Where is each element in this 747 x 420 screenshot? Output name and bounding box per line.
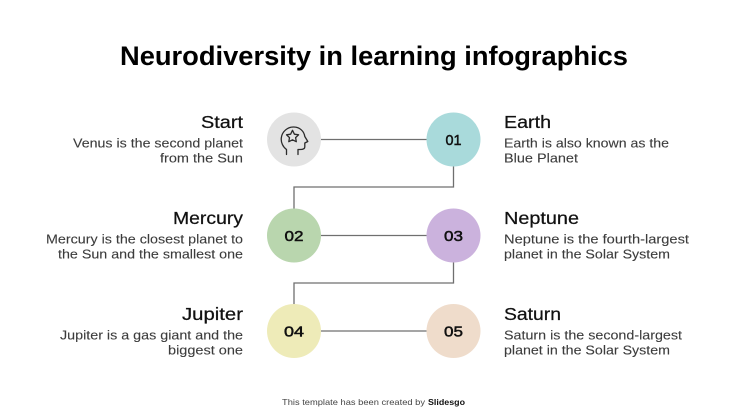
node: 04: 04	[284, 324, 304, 340]
text block: Jupiter	[60, 304, 243, 358]
connector lines	[294, 140, 454, 331]
text block: Saturn: Saturn is the second-largest	[504, 328, 682, 342]
text block: Neptune: planet in the Solar System	[504, 246, 670, 262]
text block: Mercury: the Sun and the smallest one	[58, 246, 243, 262]
text block: Saturn	[504, 304, 682, 358]
footer credit: This template has been created by	[282, 397, 426, 407]
text block: Mercury	[46, 208, 243, 262]
text block: Jupiter: Jupiter is a gas giant and the	[60, 328, 243, 342]
node: start with head icon	[267, 112, 321, 166]
text block: Earth: Earth	[504, 112, 551, 132]
node: 01	[426, 112, 480, 166]
node: 04	[267, 304, 321, 358]
text block: Start: Venus is the second planet	[73, 136, 243, 150]
text block: Jupiter: biggest one	[168, 342, 243, 358]
text block: Neptune: Neptune	[504, 208, 579, 228]
text block: Start: Start	[201, 112, 243, 132]
text block: Saturn: Saturn	[504, 304, 561, 324]
node: 02: 02	[284, 228, 304, 245]
icon: head with star	[281, 127, 308, 154]
text block: Saturn: planet in the Solar System	[504, 342, 670, 358]
text block: Jupiter: Jupiter	[182, 304, 243, 324]
text block: Earth: Blue Planet	[504, 150, 579, 166]
text block: Mercury: Mercury	[173, 208, 243, 228]
text block: Earth: Earth is also known as the	[504, 136, 669, 150]
text block: Start: from the Sun	[160, 150, 243, 166]
text block: Start	[73, 112, 243, 166]
node: 01: 01	[446, 132, 462, 149]
node: 05: 05	[444, 324, 463, 340]
node: 02	[267, 208, 321, 262]
title: Neurodiversity in learning infographics	[120, 41, 628, 71]
node: 03	[426, 208, 480, 262]
footer credit: Slidesgo	[428, 397, 465, 407]
node: 03: 03	[444, 228, 463, 245]
text block: Earth	[504, 112, 669, 166]
text block: Neptune: Neptune is the fourth-largest	[504, 232, 689, 246]
text block: Mercury: Mercury is the closest planet to	[46, 232, 243, 246]
text block: Neptune	[504, 208, 689, 262]
node: 05	[426, 304, 480, 358]
